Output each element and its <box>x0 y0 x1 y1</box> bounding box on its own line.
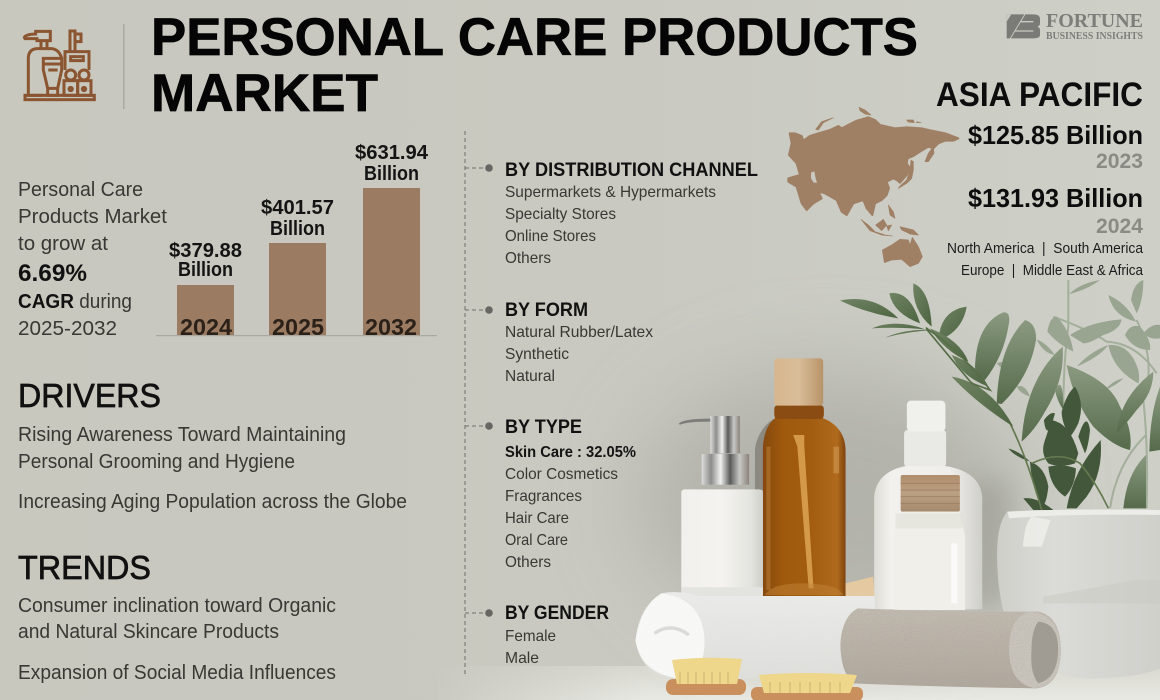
segment: by distribution channel <box>485 160 758 267</box>
bowl planter <box>997 509 1160 678</box>
title: PERSONAL CARE PRODUCTS <box>151 8 918 67</box>
segment: by distribution channel: Online Stores <box>505 228 596 245</box>
driver one: Personal Grooming and Hygiene <box>18 451 295 473</box>
regional statistics <box>936 76 1144 279</box>
CAGR text block: 2025-2032 <box>18 318 117 340</box>
trends section <box>18 549 336 684</box>
pump soap bottle <box>679 416 763 597</box>
CAGR text block <box>18 179 167 340</box>
bar 2025: $401.57 <box>261 197 334 219</box>
bar 2032 <box>355 142 429 340</box>
shadow beside bowl <box>965 480 1010 610</box>
amber bottle <box>755 358 846 596</box>
photo: personal care products still life <box>430 280 1160 700</box>
bar 2025 <box>261 197 334 340</box>
segment: by gender <box>485 603 609 667</box>
bar 2024 <box>169 240 242 340</box>
segment: by form <box>485 300 653 385</box>
timeline connector <box>465 131 484 677</box>
bar 2024: 2024 <box>180 314 232 340</box>
trend one: Consumer inclination toward Organic <box>18 595 336 617</box>
map: Asia Pacific <box>788 107 958 267</box>
plant left side <box>840 283 1013 427</box>
bar 2032: $631.94 <box>355 142 429 164</box>
icon: personal care products <box>24 31 94 100</box>
bright front stems <box>970 382 1108 510</box>
region heading: ASIA PACIFIC <box>936 76 1143 114</box>
bar chart: market size <box>156 142 437 340</box>
wooden brush one <box>666 658 746 695</box>
CAGR text block: Personal Care <box>18 179 143 201</box>
CAGR text block: CAGR during <box>18 291 132 313</box>
plant right side <box>970 280 1160 510</box>
grey rolled towel <box>840 608 1061 688</box>
logo mark <box>1007 14 1040 39</box>
segment: by type <box>485 417 636 571</box>
bar 2025: 2025 <box>272 314 324 340</box>
wooden brush two <box>751 673 863 700</box>
logo: Fortune Business Insights: BUSINESS INSIGHTS <box>1046 31 1143 42</box>
logo: Fortune Business Insights: FORTUNE <box>1046 10 1143 32</box>
segment: by gender: BY GENDER <box>505 603 609 624</box>
pump lotion bottle <box>874 401 982 610</box>
title: MARKET <box>151 64 378 123</box>
bar 2032: Billion <box>364 163 419 185</box>
warm folded cloth behind <box>846 577 875 597</box>
CAGR text block: 6.69% <box>18 260 87 287</box>
year 2024: 2024 <box>1096 215 1143 238</box>
bar 2024: Billion <box>178 259 233 281</box>
segment: by form: Synthetic <box>505 346 569 363</box>
other regions <box>947 241 1144 279</box>
segment: by type: Skin Care : 32.05% <box>505 444 636 461</box>
segment: by type: Fragrances <box>505 488 582 505</box>
bar 2025: Billion <box>270 218 325 240</box>
segment: by type: Others <box>505 554 551 571</box>
logo: Fortune Business Insights <box>1007 10 1143 42</box>
trends heading: TRENDS <box>18 549 151 586</box>
driver one: Rising Awareness Toward Maintaining <box>18 424 346 446</box>
value 2024: $131.93 Billion <box>968 183 1143 213</box>
other regions: North America | South America <box>947 241 1144 257</box>
wall shadow <box>640 370 1020 630</box>
segment: by type: Hair Care <box>505 510 569 527</box>
segment: by type: Oral Care <box>505 532 568 549</box>
value 2023: $125.85 Billion <box>968 120 1143 150</box>
mid leaves <box>975 312 1160 508</box>
segment: by form: BY FORM <box>505 300 588 321</box>
driver two: Increasing Aging Population across the Globe <box>18 491 407 513</box>
title <box>151 8 918 123</box>
segment: by type: Color Cosmetics <box>505 466 618 483</box>
trend one <box>18 595 336 643</box>
drivers heading: DRIVERS <box>18 377 161 414</box>
white rolled towel <box>635 592 875 680</box>
segment: by distribution channel: BY DISTRIBUTION CHANNEL <box>505 160 758 181</box>
CAGR text block: to grow at <box>18 233 108 255</box>
segment: by form: Natural Rubber/Latex <box>505 324 653 341</box>
year 2023: 2023 <box>1096 150 1143 173</box>
segment: by distribution channel: Others <box>505 250 551 267</box>
segment: by form: Natural <box>505 368 555 385</box>
segment: by gender: Male <box>505 650 539 667</box>
divider <box>123 24 124 109</box>
segment: by distribution channel: Supermarkets & Hypermarkets <box>505 184 716 201</box>
trend one: and Natural Skincare Products <box>18 621 279 643</box>
table surface <box>430 666 1160 700</box>
trend two: Expansion of Social Media Influences <box>18 662 336 684</box>
bar 2024: $379.88 <box>169 240 242 262</box>
dark centre leaves <box>1008 387 1101 510</box>
bar 2032: 2032 <box>365 314 417 340</box>
pale back leaves <box>997 280 1160 397</box>
segment: by type: BY TYPE <box>505 417 582 438</box>
pale back stems <box>1053 280 1157 508</box>
drivers section <box>18 377 407 513</box>
segment: by distribution channel: Specialty Stores <box>505 206 616 223</box>
segment: by gender: Female <box>505 628 556 645</box>
driver one <box>18 424 346 473</box>
other regions: Europe | Middle East & Africa <box>961 263 1144 279</box>
CAGR text block: Products Market <box>18 206 167 228</box>
